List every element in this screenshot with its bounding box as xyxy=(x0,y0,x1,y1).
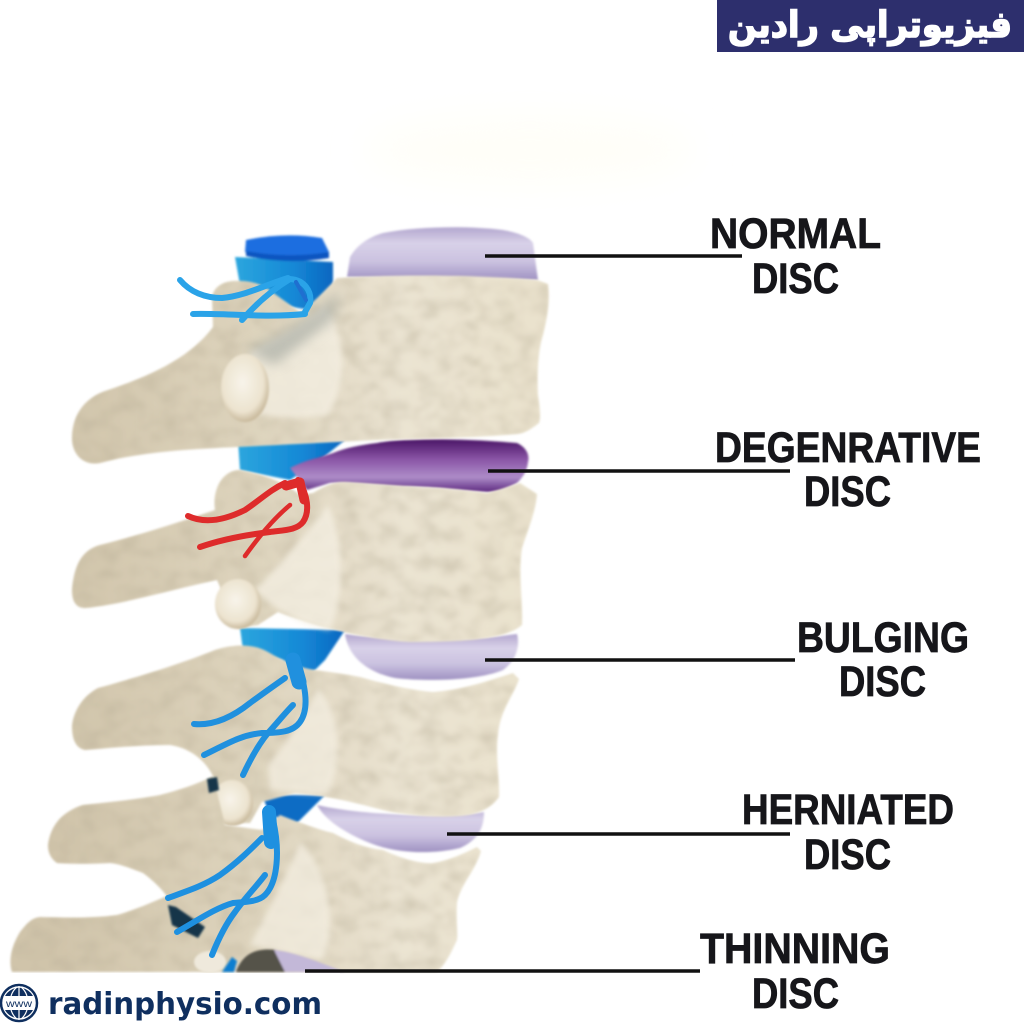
label: thinning disc: DISC xyxy=(752,970,839,1018)
nerves: bulging, blue xyxy=(194,660,306,775)
label: bulging disc: DISC xyxy=(839,658,926,706)
vertebra 1 xyxy=(72,276,549,464)
disc: bulging xyxy=(345,634,518,680)
label: normal disc: DISC xyxy=(752,255,839,303)
logo banner: فیزیوتراپی رادین xyxy=(728,5,1012,46)
label: herniated disc: HERNIATED xyxy=(742,786,954,834)
disc: degenerative xyxy=(290,439,529,492)
label: thinning disc: THINNING xyxy=(700,925,890,973)
spinal canal xyxy=(235,235,345,825)
white cut along the bottom xyxy=(0,973,340,1024)
dark gaps between processes xyxy=(168,777,345,972)
label: herniated disc xyxy=(742,786,954,879)
disc: herniated xyxy=(317,805,484,852)
website address: radinphysio.com xyxy=(48,987,322,1022)
nerves: degenerative, red xyxy=(188,480,307,556)
label: thinning disc xyxy=(700,925,890,1018)
nerves: herniated, blue xyxy=(168,812,277,955)
spine illustration xyxy=(0,227,795,1024)
label: degenerative disc: DISC xyxy=(804,468,891,516)
leader lines xyxy=(305,256,795,971)
label: normal disc: NORMAL xyxy=(710,210,881,258)
website footer xyxy=(1,985,322,1022)
vertebra 2 xyxy=(72,470,537,642)
label: degenerative disc: DEGENRATIVE xyxy=(715,424,981,472)
disc: normal xyxy=(347,227,538,280)
nerves: top, blue xyxy=(180,278,310,320)
icon: www globe: www xyxy=(5,999,33,1010)
label: bulging disc: BULGING xyxy=(797,614,969,662)
icon: www globe xyxy=(1,985,37,1021)
label: bulging disc xyxy=(797,614,969,706)
vertebra 3 xyxy=(72,646,519,826)
label: normal disc xyxy=(710,210,881,303)
label: herniated disc: DISC xyxy=(804,831,891,879)
label: degenerative disc xyxy=(715,424,981,516)
vertebra 4 xyxy=(10,776,481,973)
